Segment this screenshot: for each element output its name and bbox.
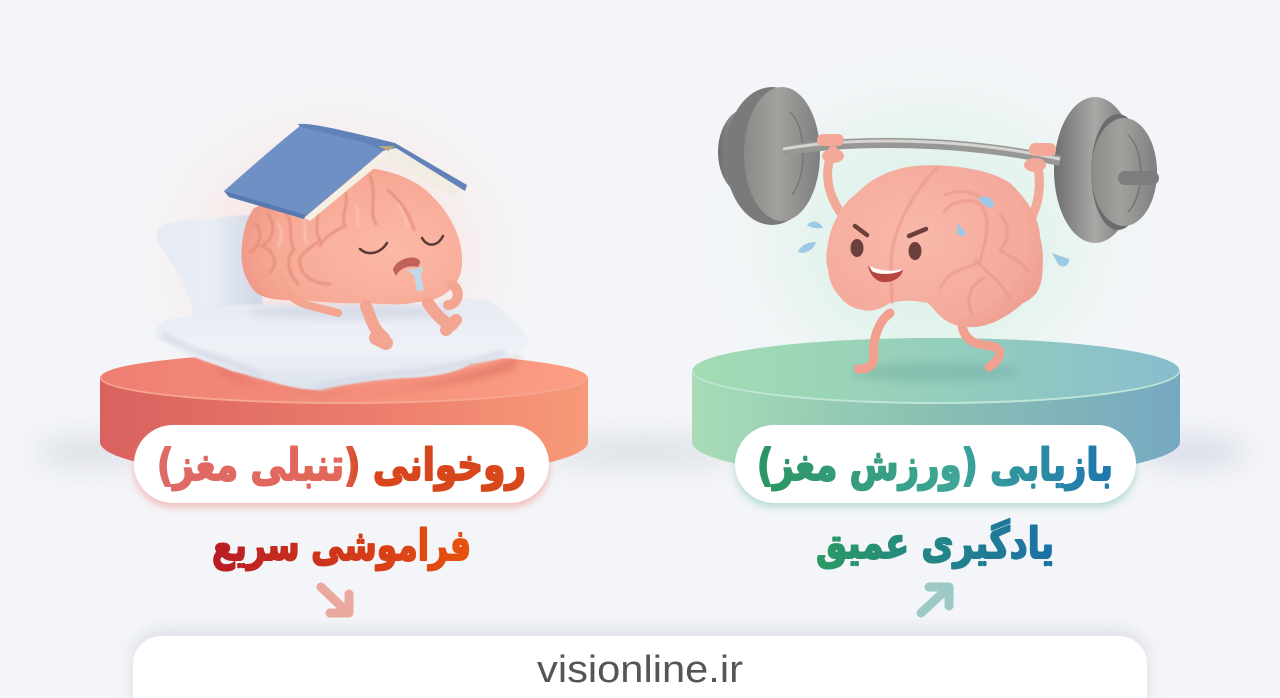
icon: open book	[224, 124, 467, 221]
subheading: deep learning: یادگیری عمیق	[816, 518, 1054, 569]
icon: legs	[858, 313, 1000, 369]
subheading: fast forgetting: فراموشی سریع	[212, 521, 471, 571]
icon: hands	[817, 134, 1056, 172]
arrow: up right	[921, 587, 949, 613]
icon: closed eyes and mouth	[360, 236, 443, 291]
bottom card	[133, 630, 1147, 698]
icon: arms and legs	[283, 278, 458, 343]
icon: barbell left plates	[718, 87, 820, 225]
icon: front pillow	[156, 299, 528, 390]
green glow	[690, 35, 1170, 445]
heading: rote reading: روخوانی (تنبلی مغز)	[157, 440, 526, 491]
icon: sweat drops	[798, 197, 1069, 266]
icon: sleeping brain body	[241, 168, 462, 304]
icon: arms	[828, 150, 1039, 238]
panel: strong brain podium	[625, 338, 1247, 480]
red glow	[110, 65, 560, 445]
icon: bar	[783, 143, 1060, 161]
panel: lazy brain podium	[35, 352, 655, 480]
arrow: down right	[321, 587, 349, 613]
icon: barbell right plates	[1054, 97, 1157, 243]
icon: back pillow	[157, 215, 264, 318]
icon: strong brain body	[826, 165, 1043, 327]
illustration: sleeping brain with book on pillow	[156, 124, 528, 394]
icon: face	[850, 226, 926, 282]
left label pill	[134, 425, 549, 507]
website address: visionline.ir	[537, 649, 743, 691]
illustration: brain lifting barbell	[718, 87, 1157, 369]
right label pill	[735, 425, 1136, 507]
heading: retrieval: بازیابی (ورزش مغز)	[757, 440, 1113, 491]
icon: pillow shadow on podium	[210, 356, 520, 394]
